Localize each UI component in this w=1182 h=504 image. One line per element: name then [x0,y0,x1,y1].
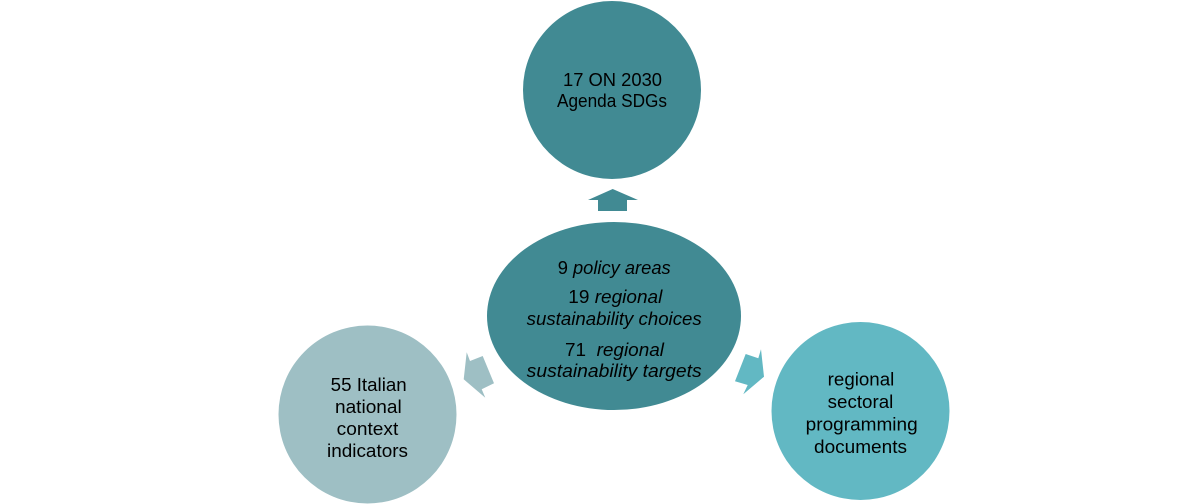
node: central policy ellipse: sustainability targets [527,360,702,381]
node: 55 Italian national context indicators: indicators [327,440,408,461]
node: central policy ellipse: sustainability choices [527,308,702,329]
node: 55 Italian national context indicators: context [337,418,398,439]
node: central policy ellipse: 19 regional [568,286,663,307]
arrow: up to SDGs [588,189,638,211]
node: central policy ellipse [487,222,741,410]
node: 17 ON 2030 Agenda SDGs: 17 ON 2030 [563,69,662,90]
node: 17 ON 2030 Agenda SDGs: Agenda SDGs [557,90,667,111]
node: central policy ellipse: 71 regional [565,339,665,360]
node: 55 Italian national context indicators: 55 Italian [331,374,407,395]
node: regional sectoral programming documents: programming [806,414,918,435]
node: 55 Italian national context indicators [278,326,456,504]
node: regional sectoral programming documents: sectoral [828,391,893,412]
node: 55 Italian national context indicators: national [335,396,402,417]
node: regional sectoral programming documents: regional [828,369,894,390]
arrow: to programming documents [735,349,764,394]
arrow: to Italian indicators [464,352,494,398]
node: 17 ON 2030 Agenda SDGs [523,1,701,179]
node: central policy ellipse: 9 policy areas [558,257,671,278]
node: regional sectoral programming documents [772,322,950,500]
node: regional sectoral programming documents: documents [814,436,907,457]
